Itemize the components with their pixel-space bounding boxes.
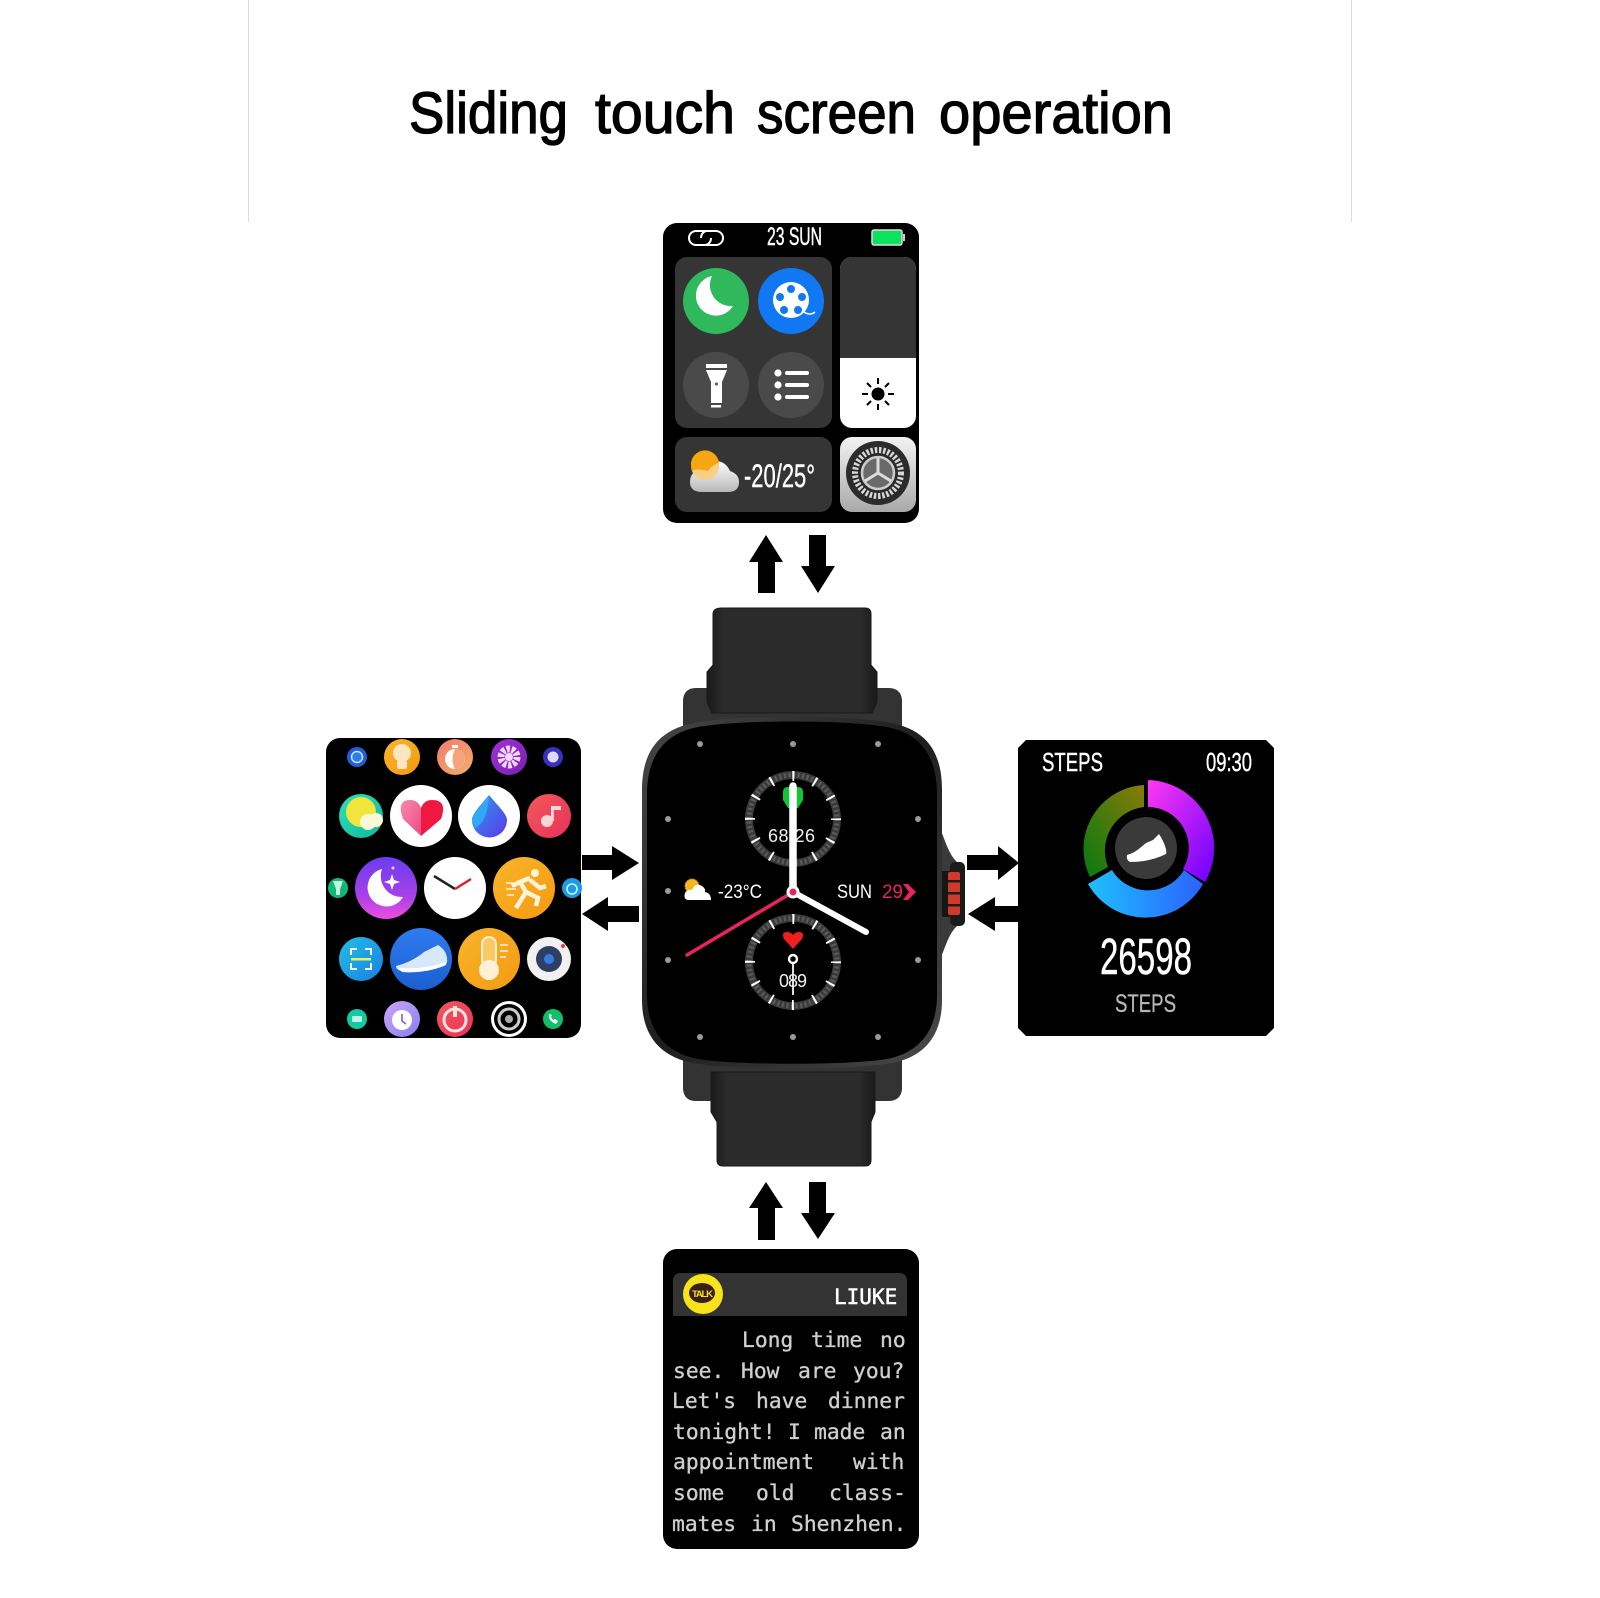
ring chart (1084, 780, 1214, 918)
arrow: right (right pair) (967, 846, 1019, 880)
message body: Shenzhen. (791, 1512, 906, 1537)
bottom strap (711, 1072, 875, 1166)
weather tile: -20/25° (744, 458, 815, 494)
dial reading: heart rate: 089 (779, 971, 807, 991)
lower dial pivot (789, 955, 797, 995)
icon: film reel (758, 268, 824, 334)
title (409, 81, 1173, 146)
top lugs (683, 688, 902, 726)
weather reading: -23°C (718, 882, 762, 903)
message body: made (814, 1420, 865, 1445)
top strap (707, 608, 877, 713)
message body: How (741, 1359, 780, 1384)
quick toggles panel (675, 257, 832, 428)
sender name: LIUKE (834, 1285, 897, 1309)
icon: clock (424, 857, 486, 919)
message header bar (673, 1273, 907, 1316)
icon: KakaoTalk (683, 1274, 723, 1314)
message body: old (756, 1481, 794, 1506)
hour dots (665, 741, 921, 1040)
icon: small info (347, 747, 367, 767)
message body: you? (853, 1359, 904, 1384)
title: operation (939, 81, 1173, 146)
message body: appointment (673, 1450, 814, 1475)
left margin line (248, 0, 249, 222)
message body: Let's (672, 1389, 736, 1414)
icon: weather (684, 879, 711, 900)
message body: I (788, 1420, 801, 1445)
day label: SUN (837, 882, 872, 903)
icon: small power (562, 878, 582, 898)
arrow: up (bottom) (749, 1182, 783, 1240)
date text: 23 SUN (767, 223, 822, 251)
icon: power (437, 1001, 473, 1037)
icon: music (527, 794, 571, 838)
icon: step marker (783, 787, 803, 808)
title: screen (757, 81, 916, 146)
message body: are (798, 1359, 836, 1384)
side button housing (932, 812, 957, 976)
icon: battery (872, 230, 905, 245)
message body: time (811, 1328, 862, 1353)
panel: app grid screen (326, 738, 582, 1038)
panel: message screen (663, 1249, 919, 1549)
case (642, 717, 942, 1068)
icon: settings (491, 1001, 527, 1037)
dial reading: steps: 68:26 (768, 826, 815, 846)
message body: Long (742, 1328, 793, 1353)
icon: camera (527, 937, 571, 981)
message body: have (756, 1389, 807, 1414)
message body: dinner (828, 1389, 905, 1414)
panel: control centre screen (663, 223, 919, 523)
icon: link (689, 231, 723, 245)
steps heading: STEPS (1042, 747, 1103, 777)
message body: no (880, 1328, 906, 1353)
message body: class- (829, 1481, 906, 1506)
icon: small film (543, 747, 563, 767)
icon: flower (491, 739, 527, 775)
icon: thermometer (458, 928, 520, 990)
bottom lugs (683, 1056, 902, 1101)
clock hands (687, 786, 866, 955)
arrow: down (bottom) (801, 1182, 835, 1239)
icon: water drop (458, 785, 520, 847)
screen (647, 722, 937, 1064)
message body (672, 1328, 906, 1537)
icon: list (758, 352, 824, 418)
icon: sleep moon (355, 857, 417, 919)
icon: heart rate (390, 785, 452, 847)
icon: running (493, 857, 555, 919)
icon: phone (543, 1009, 563, 1029)
icon: sneaker (1127, 834, 1166, 862)
arrow: down (top) (801, 535, 835, 593)
arrow: left (left pair) (582, 897, 639, 931)
arrow: up (top) (749, 535, 783, 593)
arrow: right (left pair) (582, 846, 639, 880)
icon: small message (347, 1009, 367, 1029)
weather tile (675, 437, 832, 512)
brightness slider (840, 257, 916, 428)
date number (882, 882, 916, 903)
upper dial (749, 775, 837, 863)
message body: tonight! (673, 1420, 776, 1445)
icon: settings gear (840, 437, 916, 512)
panel: steps screen (1018, 740, 1274, 1036)
icon: weather tile (339, 794, 383, 838)
arrow: left (right pair) (968, 897, 1018, 931)
message body: mates (672, 1512, 736, 1537)
crown (938, 862, 965, 926)
step label: STEPS (1115, 990, 1176, 1018)
time: 09:30 (1206, 747, 1252, 777)
step count: 26598 (1100, 928, 1192, 985)
lower dial (749, 918, 837, 1006)
title: touch (595, 81, 735, 146)
message body: an (880, 1420, 906, 1445)
message body: some (673, 1481, 724, 1506)
watch (642, 608, 965, 1166)
message body: with (853, 1450, 904, 1475)
icon: heart (783, 932, 803, 949)
icon: shoe (390, 928, 452, 990)
title: Sliding (409, 81, 568, 146)
icon: bulb (384, 739, 420, 775)
right margin line (1351, 0, 1352, 222)
icon: small flashlight (328, 878, 348, 898)
date number: 29 (882, 882, 903, 903)
icon: KakaoTalk: TALK (692, 1289, 713, 1300)
message body: see. (673, 1359, 724, 1384)
icon: timer (437, 739, 473, 775)
icon: flashlight (683, 352, 749, 418)
icon: alarm (384, 1001, 420, 1037)
message body: in (751, 1512, 777, 1537)
icon: scan (339, 937, 383, 981)
icon: do not disturb moon (683, 268, 749, 334)
